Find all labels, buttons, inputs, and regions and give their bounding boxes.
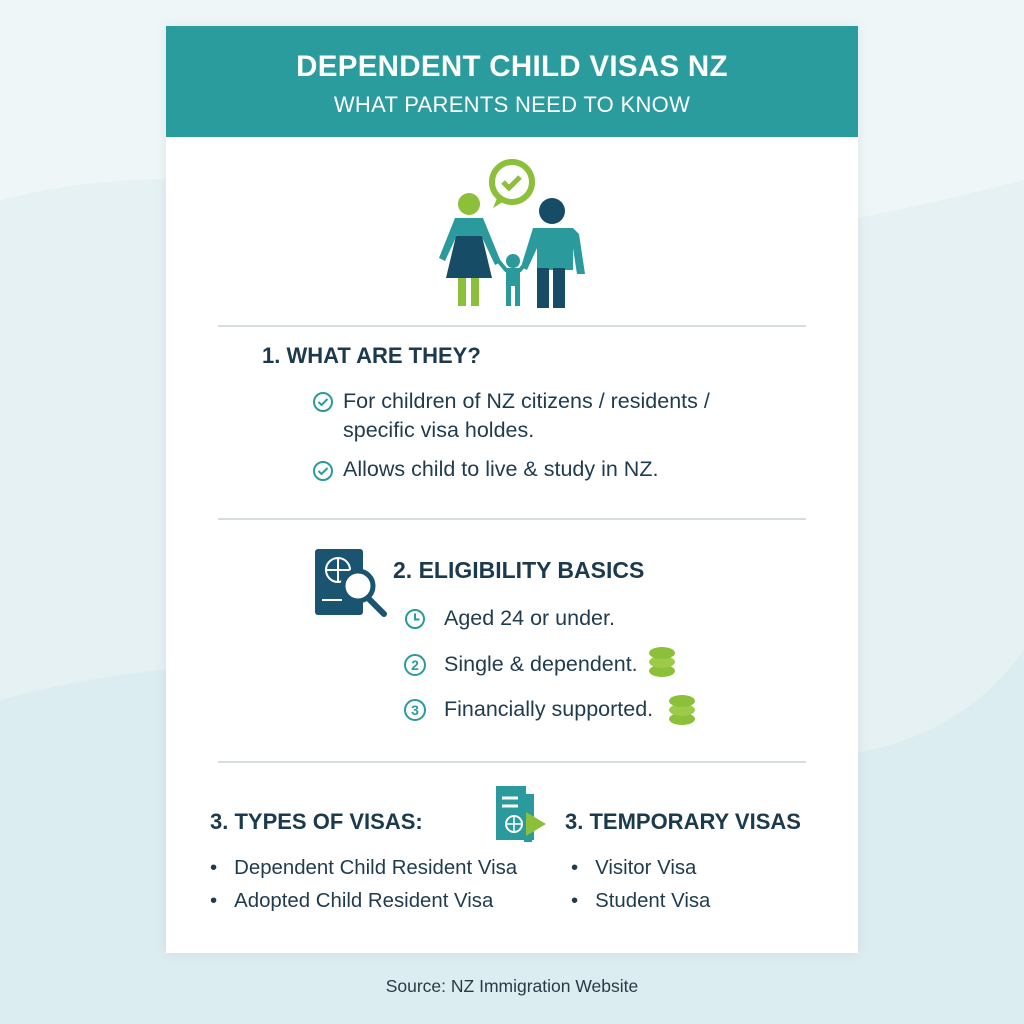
section 2 bullets: 2 [411, 657, 419, 673]
section 1 bullets [313, 389, 710, 481]
section 2 bullets: Aged 24 or under. [444, 606, 615, 630]
section 2 bullets: Single & dependent. [444, 652, 638, 676]
section 1 bullets: specific visa holdes. [343, 418, 534, 442]
source: Source: NZ Immigration Website [386, 976, 638, 996]
temporary list [571, 857, 710, 912]
section 3 heading: types: 3. TYPES OF VISAS: [210, 809, 423, 834]
types list: • Adopted Child Resident Visa [210, 890, 493, 912]
section 2 bullets [404, 606, 695, 725]
icon: passport with magnifier [315, 549, 387, 617]
temporary list: • Visitor Visa [571, 857, 696, 879]
section 2 heading: 2. ELIGIBILITY BASICS [393, 557, 644, 583]
section 3 heading: temporary: 3. TEMPORARY VISAS [565, 809, 801, 834]
icon: check [313, 461, 333, 481]
types list: • Dependent Child Resident Visa [210, 857, 517, 879]
header [166, 26, 858, 137]
section 2 bullets: 3 [411, 702, 419, 718]
icon: check [313, 392, 333, 412]
card [166, 26, 858, 953]
temporary list: • Student Visa [571, 890, 710, 912]
icon: visa document [496, 786, 546, 842]
subtitle: WHAT PARENTS NEED TO KNOW [334, 92, 690, 117]
section 2 bullets: Financially supported. [444, 697, 653, 721]
icon: coins [669, 695, 695, 725]
section 1 bullets: For children of NZ citizens / residents / [343, 389, 710, 413]
icon: clock [405, 609, 425, 629]
section 1 bullets: Allows child to live & study in NZ. [343, 457, 658, 481]
icon: family with check bubble [439, 159, 585, 308]
icon: coins [649, 647, 675, 677]
types list [210, 857, 518, 912]
title: DEPENDENT CHILD VISAS NZ [296, 50, 728, 83]
section 1 heading: 1. WHAT ARE THEY? [262, 343, 481, 368]
